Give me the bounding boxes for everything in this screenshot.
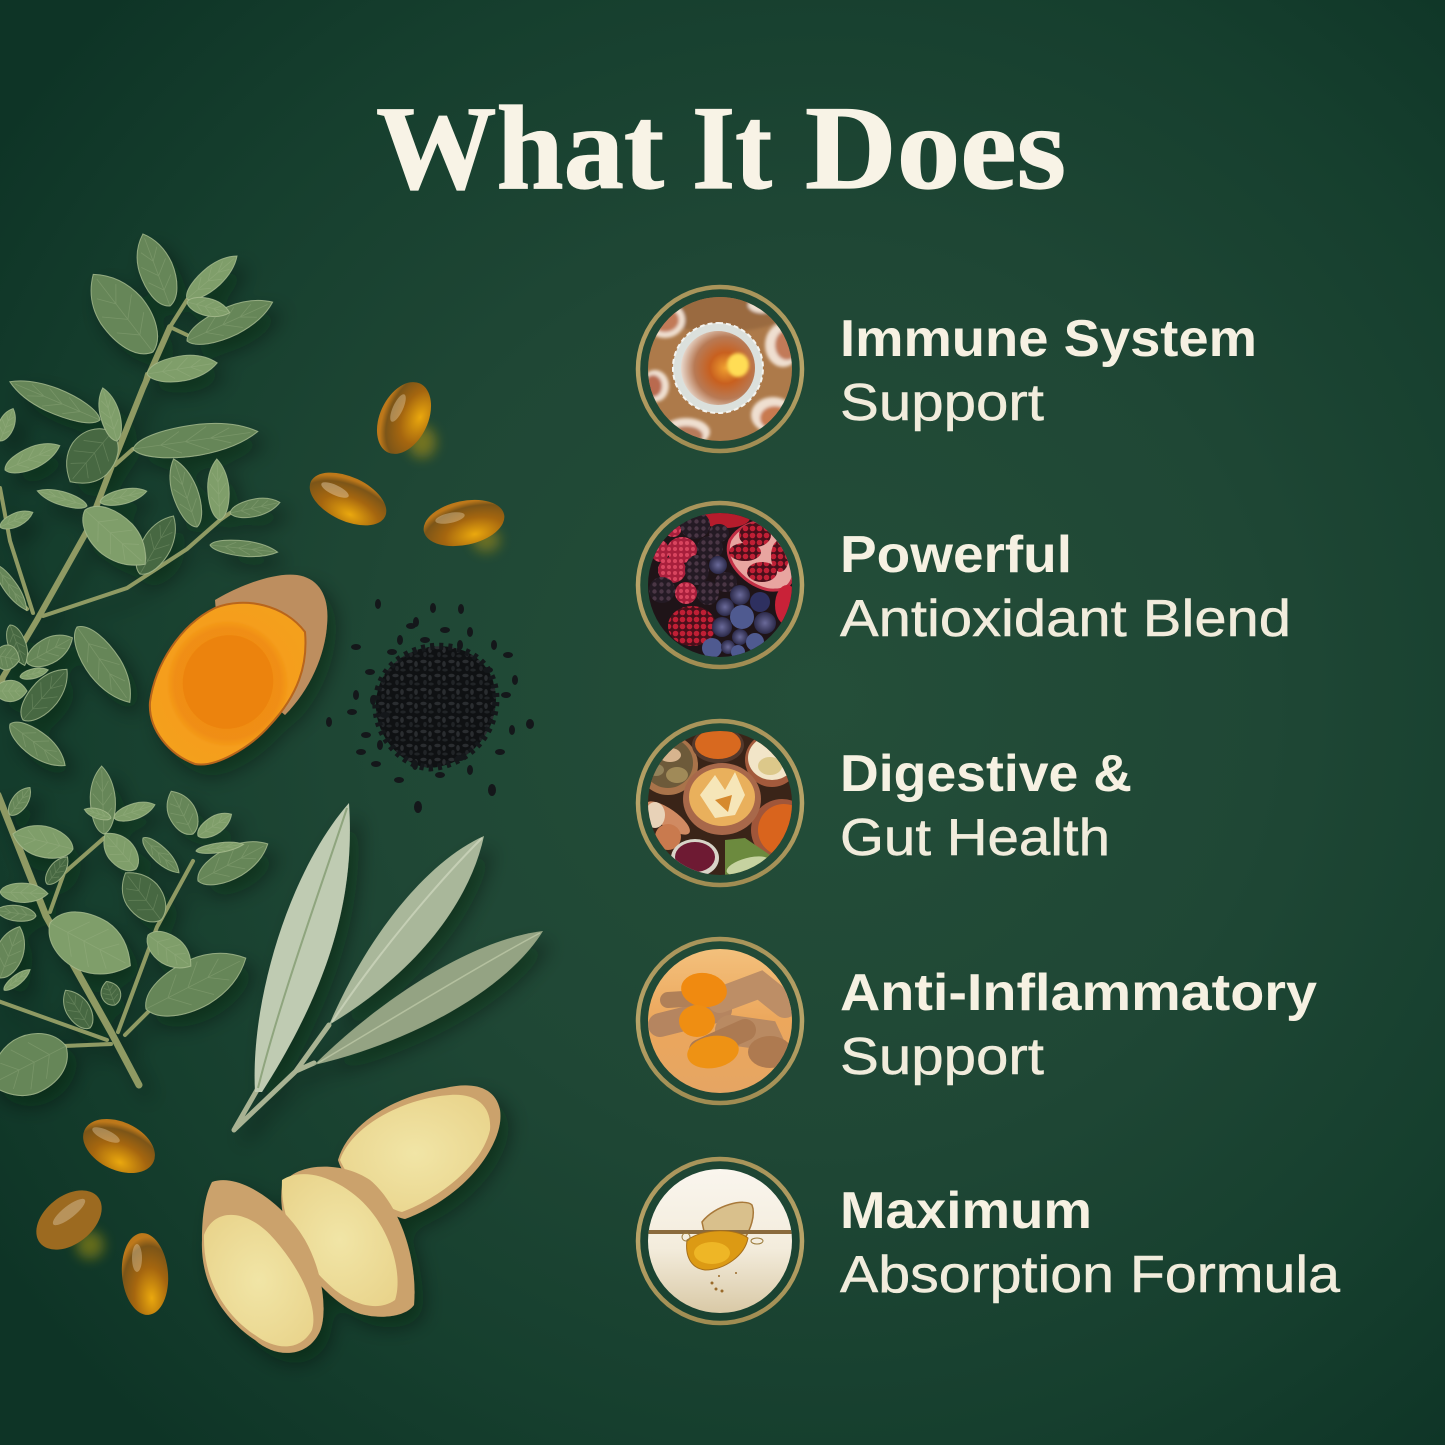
illustration: ginger slices	[202, 1085, 500, 1353]
illustration: capsule right	[419, 493, 509, 553]
label: digestive and: Digestive &	[840, 745, 1132, 803]
sublabel: gut health: Gut Health	[840, 809, 1110, 867]
illustration: oregano sprig bottom	[0, 766, 275, 1110]
title: It	[692, 81, 772, 214]
icon: immune cell	[638, 287, 802, 451]
label: anti-inflammatory: Anti-Inflammatory	[840, 964, 1317, 1022]
illustration: capsule bottom left	[25, 1178, 113, 1262]
illustration: capsule lower left	[74, 1108, 164, 1184]
illustration: capsule middle	[302, 462, 394, 536]
sublabel: support: Support	[840, 374, 1045, 432]
icon: fermented foods	[638, 721, 813, 885]
illustration: black seeds	[326, 599, 534, 813]
label: maximum: Maximum	[840, 1182, 1092, 1240]
item: antioxidant blend	[638, 503, 1291, 667]
icon: berries	[638, 503, 802, 667]
title: What	[376, 81, 664, 214]
icon: turmeric root	[638, 939, 802, 1103]
sublabel: absorption formula: Absorption Formula	[840, 1246, 1340, 1304]
sublabel: antioxidant blend: Antioxidant Blend	[840, 590, 1291, 648]
item: immune system	[638, 287, 1257, 451]
item: digestive and gut health	[638, 721, 1132, 885]
illustration: capsule top	[366, 373, 442, 463]
illustration: oregano sprig top	[0, 228, 282, 776]
label: powerful: Powerful	[840, 526, 1072, 584]
illustration: turmeric slice	[150, 575, 327, 765]
item: anti-inflammatory support	[638, 939, 1317, 1103]
illustration: capsule bottom	[119, 1231, 171, 1317]
item: maximum absorption	[638, 1159, 1340, 1323]
illustration: olive leaves	[234, 803, 543, 1130]
label: immune system: Immune System	[840, 310, 1257, 368]
title: Does	[805, 81, 1066, 214]
sublabel: support: Support	[840, 1028, 1045, 1086]
icon: oil capsule	[638, 1159, 802, 1323]
